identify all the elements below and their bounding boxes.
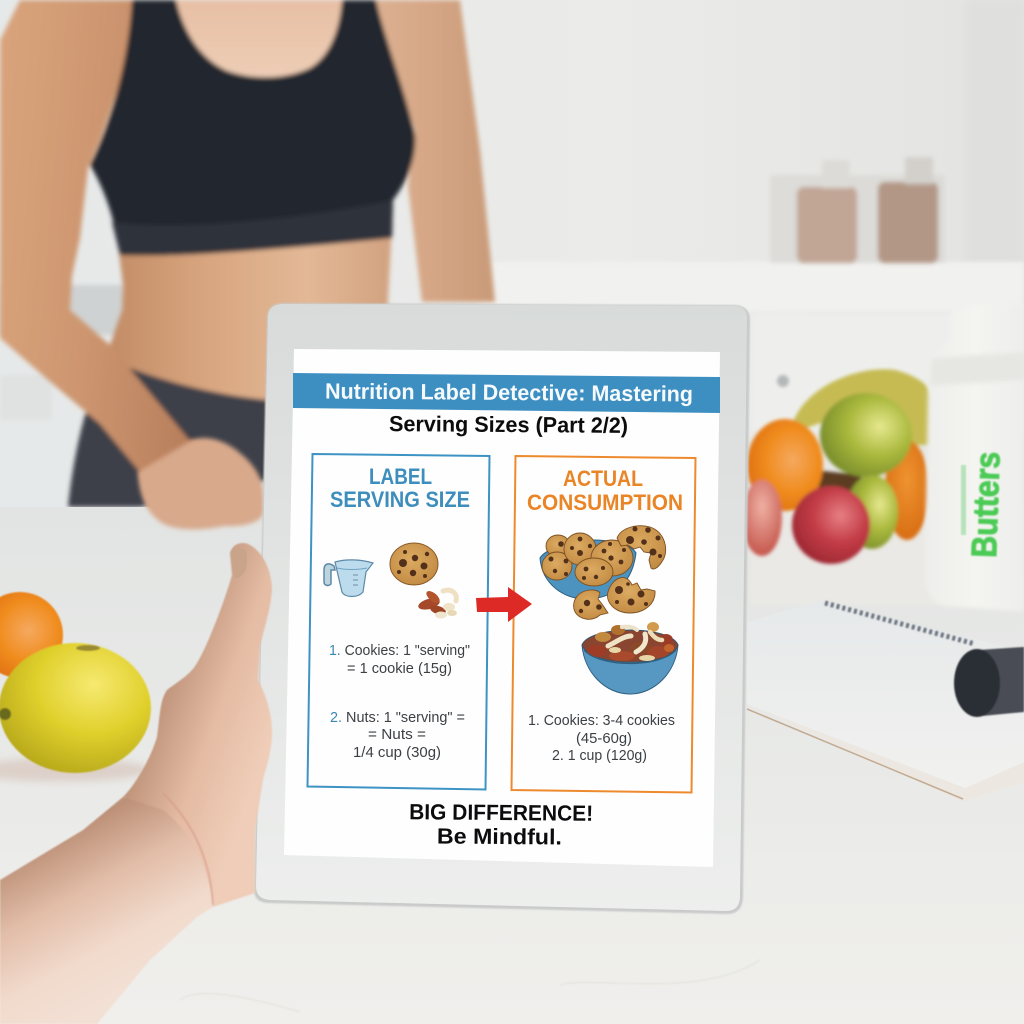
forearm and hand holding tablet: [0, 543, 272, 1024]
icon: bitten cookie lower right: [607, 577, 655, 613]
text: actual amounts: (45-60g): [576, 731, 632, 747]
sports bra: [90, 0, 415, 255]
bra band: [112, 200, 393, 255]
tablet: [254, 303, 750, 914]
forearm: [0, 793, 215, 1024]
palm and thumb: [123, 543, 272, 907]
counter surface: [0, 505, 1024, 1024]
chest: [170, 0, 350, 90]
title banner: [293, 373, 720, 413]
callout: big difference: BIG DIFFERENCE!: [409, 799, 593, 826]
text: label amounts: [329, 643, 470, 761]
right arm: [370, 0, 495, 302]
panel heading: SERVING SIZE: [330, 487, 470, 512]
panel: label serving size: [308, 454, 490, 790]
blurred fruit pile: [742, 369, 933, 564]
panel heading: [527, 466, 683, 515]
poster sheet: [284, 349, 720, 867]
text: label amounts: = Nuts =: [368, 727, 426, 743]
left fruit: [0, 592, 151, 782]
panel: actual consumption: [512, 456, 696, 792]
callout: big difference: Be Mindful.: [437, 823, 562, 850]
text: label amounts: = 1 cookie (15g): [347, 661, 452, 677]
text: label amounts: 2. Nuts: 1 "serving" =: [330, 710, 465, 726]
text: actual amounts: 2. 1 cup (120g): [552, 748, 647, 764]
pen cap: [954, 647, 1024, 717]
text: actual amounts: 1. Cookies: 3-4 cookies: [528, 713, 675, 729]
torso: [110, 225, 392, 410]
panel heading: ACTUAL: [563, 466, 643, 491]
icon: bowl of nuts: [582, 622, 678, 694]
icon: bitten cookie lower left: [574, 590, 608, 619]
woman's resting hand: [138, 438, 264, 529]
thumbnail: [231, 548, 247, 578]
shorts: [68, 368, 268, 507]
icon: cookie: [390, 543, 438, 585]
text: actual amounts: [528, 713, 675, 764]
protein shaker bottle: [925, 303, 1024, 612]
icon: bowl of cookies: [540, 533, 636, 599]
title banner: Nutrition Label Detective: Mastering: [325, 379, 693, 406]
icon: bitten cookie top: [617, 526, 666, 569]
panel heading: CONSUMPTION: [527, 490, 683, 515]
left arm: [0, 0, 215, 510]
bottle small text line: [961, 465, 966, 535]
icon: measuring cup: [324, 560, 373, 596]
notebook: [747, 600, 1024, 802]
panel heading: LABEL: [369, 464, 432, 489]
panel heading: [330, 464, 470, 512]
bottle label: Butters: [965, 451, 1008, 558]
text: label amounts: 1. Cookies: 1 "serving": [329, 643, 470, 659]
woman figure: [0, 0, 495, 510]
blurred jars on shelf: [770, 157, 945, 263]
callout: big difference: [409, 799, 593, 850]
text: label amounts: 1/4 cup (30g): [353, 745, 441, 761]
subtitle: Serving Sizes (Part 2/2): [389, 411, 628, 438]
icon: nuts: [417, 589, 457, 618]
arrow: [476, 587, 532, 622]
